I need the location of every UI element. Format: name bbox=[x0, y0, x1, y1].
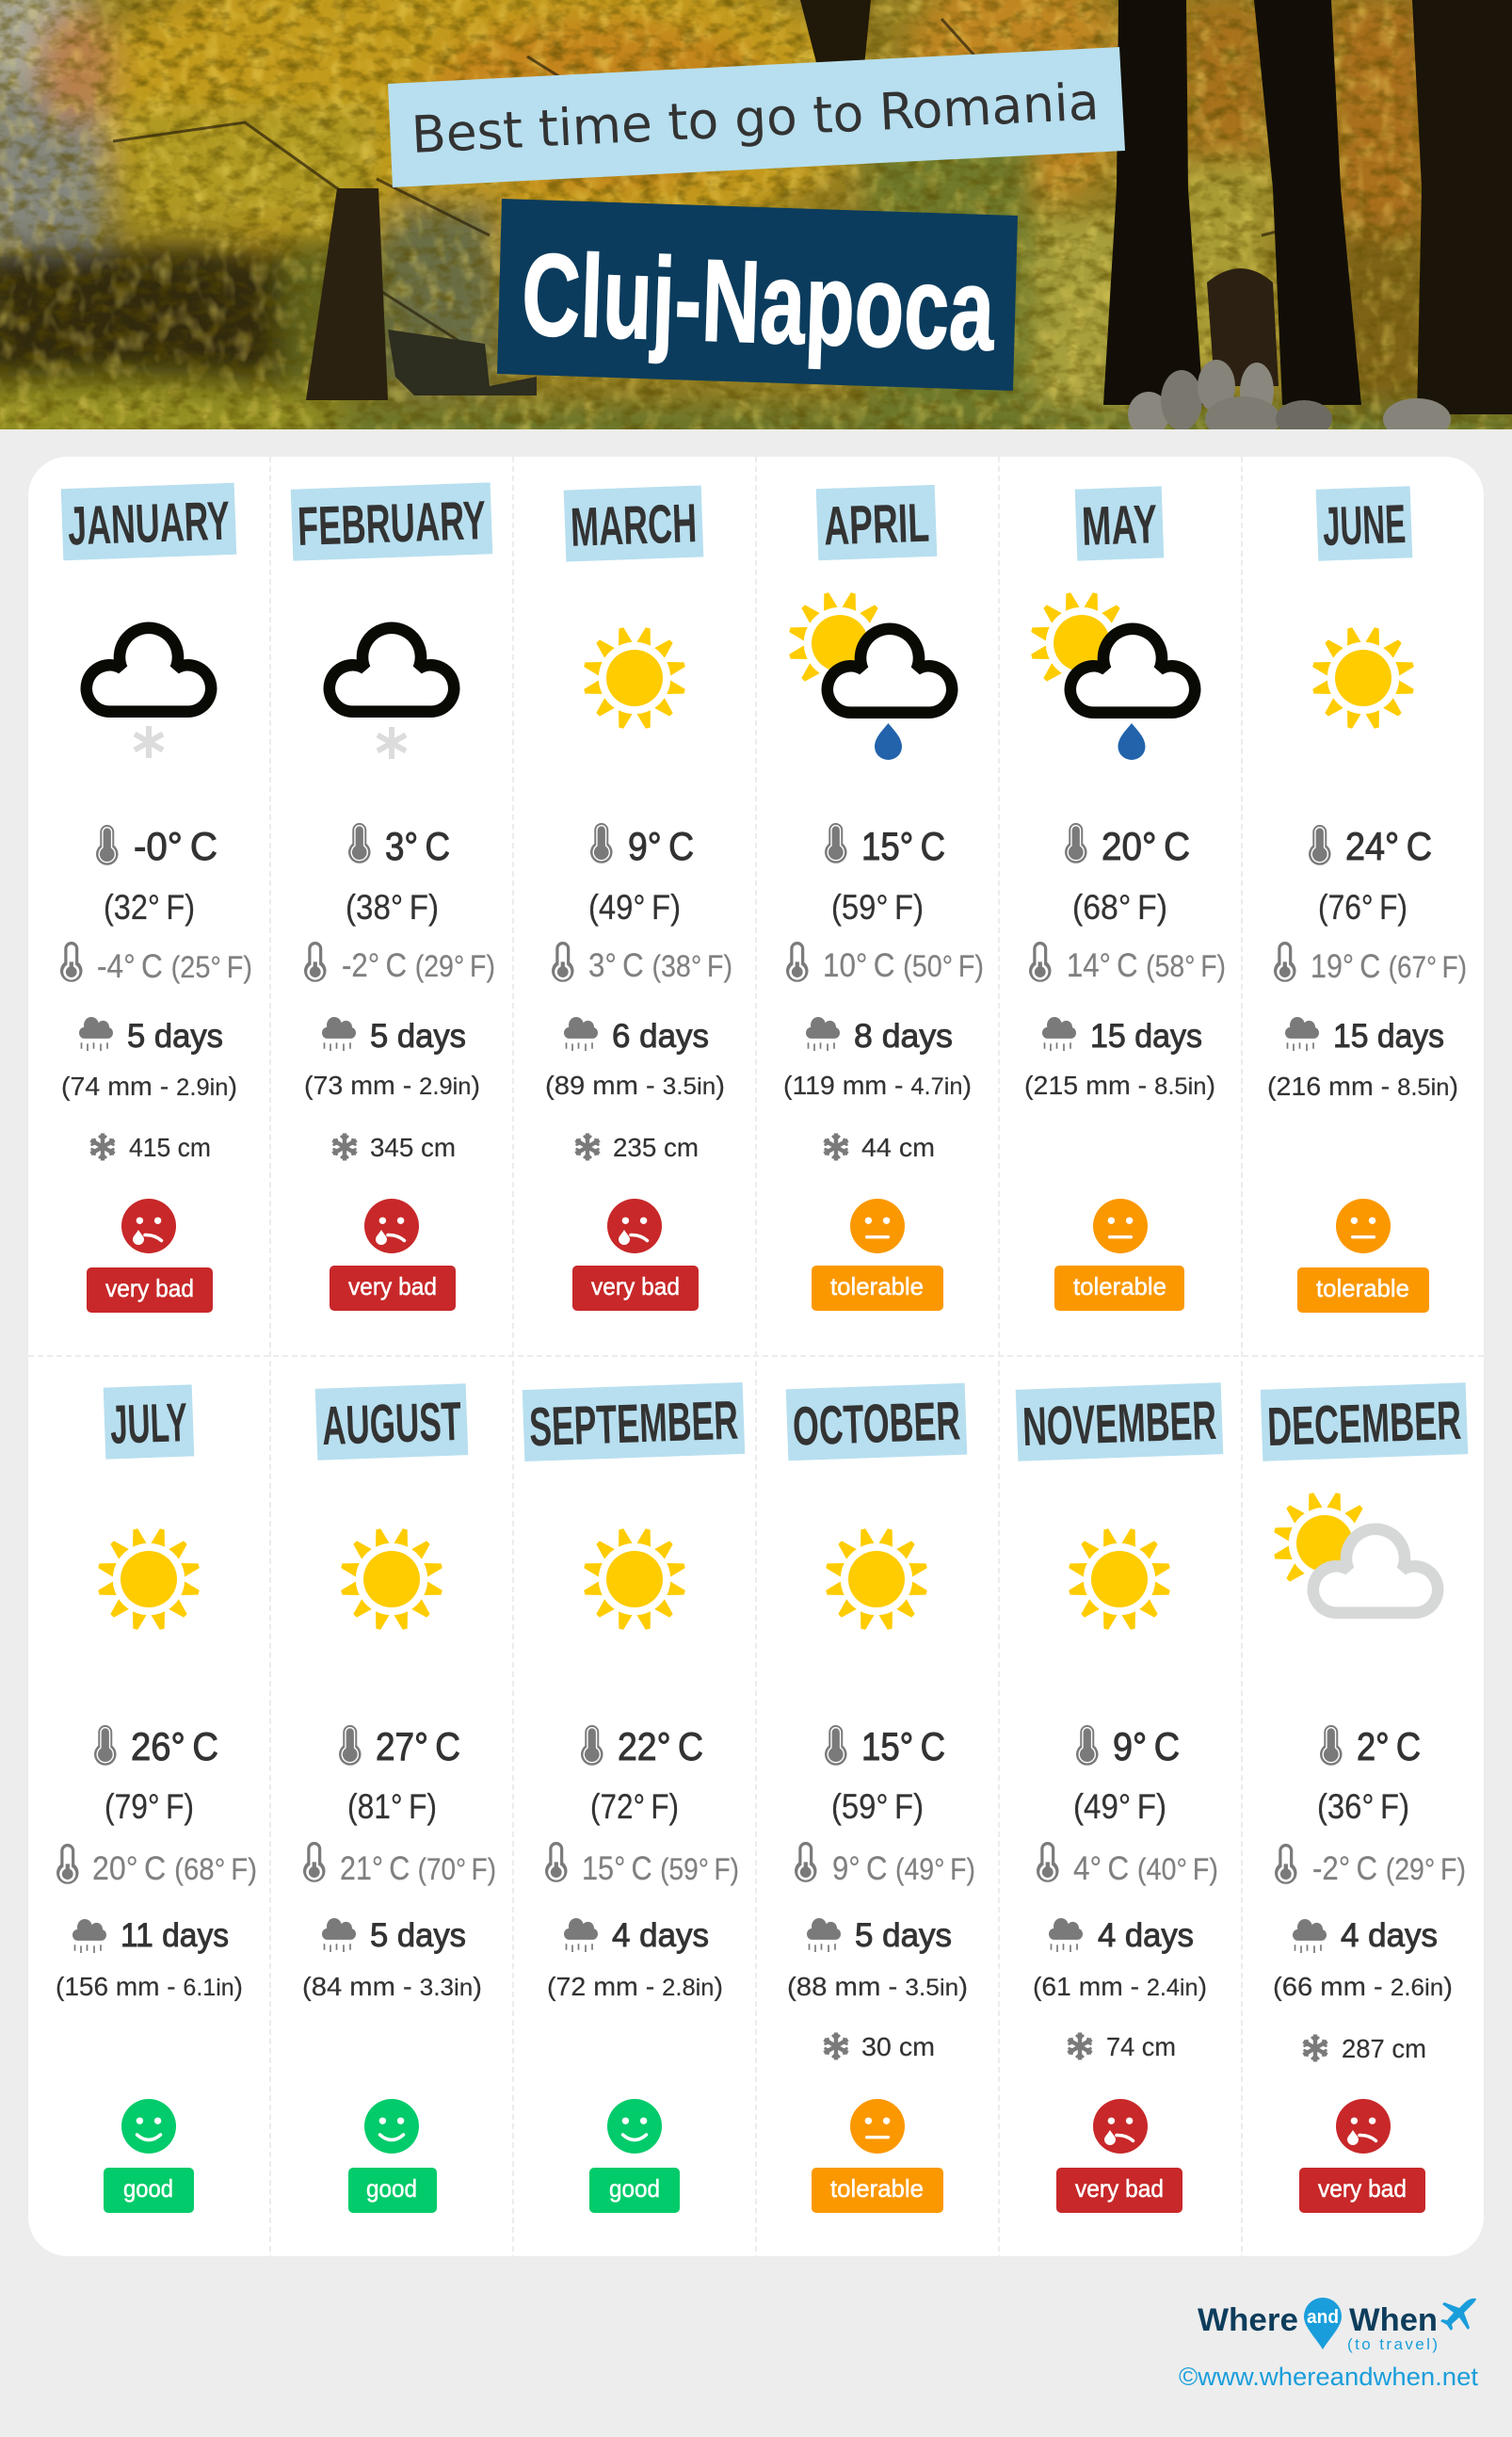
average low temperature: 4° C (40° F) bbox=[1073, 1850, 1218, 1887]
average high temperature: 2° C bbox=[1357, 1724, 1421, 1768]
month label: July bbox=[104, 1384, 194, 1460]
month label: January bbox=[61, 483, 236, 560]
icon: map pin bbox=[1304, 2298, 1342, 2349]
average high temperature: 24° C bbox=[1345, 824, 1432, 868]
rainfall: (88 mm - 3.5in) bbox=[787, 1972, 968, 2001]
month label: September: SEPTEMBER bbox=[528, 1390, 739, 1458]
panel: November bbox=[1016, 1382, 1223, 2213]
average high temperature: 3° C bbox=[385, 824, 450, 868]
rating badge: tolerable bbox=[1316, 1274, 1409, 1302]
icon: sun bbox=[583, 626, 686, 730]
average high temperature bbox=[94, 1724, 218, 1768]
icon: sun bbox=[1068, 1527, 1171, 1631]
rainfall: (215 mm - 8.5in) bbox=[1024, 1071, 1215, 1100]
rating face bbox=[121, 2099, 176, 2154]
rainy days bbox=[322, 1017, 466, 1055]
rating badge bbox=[1297, 1267, 1429, 1313]
logo: Where and When (to travel): (to travel) bbox=[1347, 2335, 1438, 2353]
rainy days bbox=[564, 1917, 709, 1954]
rainy days bbox=[1049, 1917, 1194, 1954]
high in Fahrenheit: (76° F) bbox=[1318, 888, 1407, 927]
rainy days bbox=[72, 1917, 229, 1954]
rainfall: (72 mm - 2.8in) bbox=[547, 1972, 723, 2001]
panel: May bbox=[1024, 486, 1226, 1311]
rainy days bbox=[1042, 1017, 1202, 1055]
panel: monthly climate card bbox=[28, 457, 1484, 2256]
rating badge: tolerable bbox=[830, 2174, 924, 2203]
rainy days: 5 days bbox=[370, 1018, 466, 1055]
rainy days bbox=[564, 1017, 709, 1055]
month label: November bbox=[1016, 1382, 1223, 1461]
logo: Where and When (to travel) bbox=[1198, 2298, 1476, 2353]
rating face bbox=[364, 2099, 419, 2154]
rainy days: 6 days bbox=[612, 1018, 709, 1055]
average high temperature bbox=[1065, 823, 1190, 868]
high in Fahrenheit: (81° F) bbox=[347, 1787, 437, 1826]
rating face bbox=[1093, 1199, 1148, 1253]
logo: Where and When (to travel): When bbox=[1349, 2302, 1438, 2338]
rainy days: 4 days bbox=[1341, 1917, 1438, 1954]
rainy days: 5 days bbox=[370, 1917, 466, 1954]
rating badge bbox=[589, 2168, 680, 2213]
panel: September bbox=[523, 1382, 745, 2213]
average low temperature: 20° C (68° F) bbox=[92, 1850, 257, 1887]
snowfall: 235 cm bbox=[613, 1133, 699, 1162]
panel: March bbox=[545, 485, 732, 1311]
rainy days: 11 days bbox=[121, 1917, 229, 1954]
average low temperature: 19° C (67° F) bbox=[1311, 948, 1467, 985]
rating badge: good bbox=[366, 2174, 417, 2203]
rainy days: 4 days bbox=[1098, 1917, 1194, 1954]
average low temperature bbox=[303, 1842, 496, 1887]
rating badge bbox=[812, 1266, 943, 1311]
high in Fahrenheit: (68° F) bbox=[1072, 888, 1167, 927]
rating face bbox=[1336, 2099, 1391, 2154]
average low temperature bbox=[56, 1844, 257, 1887]
month label: May: MAY bbox=[1081, 493, 1158, 557]
rainfall: (156 mm - 6.1in) bbox=[56, 1972, 243, 2001]
rainy days: 15 days bbox=[1333, 1018, 1444, 1055]
rating badge bbox=[1056, 2168, 1182, 2213]
panel: April bbox=[783, 485, 984, 1311]
rating face bbox=[1093, 2099, 1148, 2154]
average low temperature bbox=[1274, 942, 1467, 985]
month label: October bbox=[786, 1383, 967, 1461]
average low temperature: -2° C (29° F) bbox=[1312, 1850, 1466, 1887]
rainfall: (73 mm - 2.9in) bbox=[304, 1071, 480, 1100]
average low temperature bbox=[795, 1842, 975, 1887]
rainy days bbox=[322, 1917, 466, 1954]
rainfall: (89 mm - 3.5in) bbox=[545, 1071, 725, 1100]
logo: Where and When (to travel): Where bbox=[1198, 2302, 1298, 2338]
month label: February bbox=[291, 482, 492, 561]
rating badge: very bad bbox=[105, 1274, 194, 1302]
panel: October bbox=[786, 1383, 975, 2213]
average low temperature: -4° C (25° F) bbox=[97, 948, 252, 985]
rainfall: (84 mm - 3.3in) bbox=[302, 1972, 482, 2001]
average high temperature: 20° C bbox=[1102, 824, 1190, 868]
rating badge bbox=[348, 2168, 437, 2213]
average high temperature: 15° C bbox=[861, 1724, 945, 1768]
rainy days: 4 days bbox=[612, 1917, 709, 1954]
average high temperature: 22° C bbox=[618, 1724, 703, 1768]
icon: sun bbox=[583, 1527, 686, 1631]
high in Fahrenheit: (59° F) bbox=[831, 888, 924, 927]
rating badge: very bad bbox=[591, 1272, 680, 1300]
average high temperature bbox=[1076, 1724, 1180, 1768]
panel: July bbox=[56, 1384, 257, 2213]
snowfall: 30 cm bbox=[861, 2032, 935, 2061]
average high temperature: 26° C bbox=[131, 1724, 218, 1768]
website credit: ©www.whereandwhen.net bbox=[1179, 2363, 1478, 2391]
snowfall: 287 cm bbox=[1342, 2034, 1426, 2063]
rating face bbox=[607, 2099, 662, 2154]
rating badge: tolerable bbox=[1073, 1272, 1166, 1300]
icon: sun bbox=[825, 1527, 928, 1631]
snowfall bbox=[1068, 2032, 1176, 2061]
icon: sun, cloud and rain drop bbox=[1030, 591, 1195, 760]
average low temperature: 3° C (38° F) bbox=[588, 947, 732, 984]
title banner bbox=[388, 47, 1125, 187]
rating badge bbox=[1054, 1266, 1184, 1311]
snowfall bbox=[576, 1133, 699, 1162]
snowfall: 74 cm bbox=[1106, 2032, 1176, 2061]
icon: sun bbox=[1311, 626, 1415, 730]
average high temperature bbox=[96, 824, 217, 868]
rainy days: 8 days bbox=[854, 1018, 953, 1055]
title banner: Best time to go to Romania bbox=[410, 72, 1101, 165]
icon: cloud with snow bbox=[87, 628, 211, 758]
icon: map pin: and bbox=[1307, 2307, 1339, 2328]
icon: cloud with snow bbox=[330, 628, 454, 759]
month label: September bbox=[523, 1382, 745, 1461]
rainy days bbox=[1285, 1017, 1444, 1055]
rating badge: tolerable bbox=[830, 1272, 924, 1300]
average low temperature: 9° C (49° F) bbox=[832, 1850, 975, 1887]
average high temperature: 9° C bbox=[1113, 1724, 1180, 1768]
rating badge: good bbox=[123, 2174, 173, 2203]
average low temperature bbox=[1037, 1842, 1218, 1887]
month label: March: MARCH bbox=[570, 492, 698, 558]
snowfall: 44 cm bbox=[861, 1133, 935, 1162]
icon: sun and pale cloud bbox=[1273, 1492, 1438, 1613]
panel: January bbox=[60, 483, 252, 1313]
average high temperature bbox=[1320, 1724, 1421, 1768]
snowfall bbox=[90, 1133, 211, 1162]
average low temperature bbox=[304, 942, 495, 984]
month label: January: JANUARY bbox=[67, 491, 231, 557]
rating badge bbox=[87, 1267, 213, 1313]
panel: June bbox=[1267, 486, 1467, 1313]
icon: sun bbox=[340, 1527, 443, 1631]
average high temperature: 27° C bbox=[376, 1724, 460, 1768]
icon: airplane bbox=[1440, 2299, 1476, 2331]
rating face bbox=[850, 1199, 905, 1253]
average high temperature: 9° C bbox=[628, 824, 694, 868]
snowfall bbox=[825, 1133, 935, 1162]
high in Fahrenheit: (32° F) bbox=[104, 888, 195, 927]
average low temperature: 15° C (59° F) bbox=[582, 1850, 739, 1887]
snowfall bbox=[1303, 2034, 1426, 2063]
month label: October: OCTOBER bbox=[792, 1390, 961, 1458]
month label: May bbox=[1075, 486, 1164, 561]
average low temperature bbox=[552, 942, 732, 984]
panel: December bbox=[1261, 1382, 1468, 2213]
high in Fahrenheit: (49° F) bbox=[588, 888, 681, 927]
rainy days bbox=[1293, 1917, 1438, 1954]
rainy days bbox=[806, 1017, 953, 1055]
average high temperature bbox=[825, 823, 945, 868]
month label: June bbox=[1316, 486, 1412, 561]
high in Fahrenheit: (79° F) bbox=[105, 1787, 194, 1826]
city banner bbox=[497, 199, 1018, 391]
month label: March bbox=[564, 485, 703, 562]
high in Fahrenheit: (38° F) bbox=[346, 888, 439, 927]
snowfall: 415 cm bbox=[129, 1133, 211, 1162]
average high temperature bbox=[339, 1724, 460, 1768]
rating face bbox=[364, 1199, 419, 1253]
average low temperature bbox=[786, 942, 984, 984]
average low temperature: -2° C (29° F) bbox=[342, 947, 495, 984]
average high temperature: -0° C bbox=[134, 824, 217, 868]
panel: February bbox=[291, 482, 495, 1311]
rainfall: (66 mm - 2.6in) bbox=[1273, 1972, 1453, 2001]
rainy days: 5 days bbox=[127, 1018, 223, 1055]
rating badge bbox=[1299, 2168, 1425, 2213]
rating face bbox=[850, 2099, 905, 2154]
average low temperature bbox=[60, 942, 252, 985]
rainfall: (119 mm - 4.7in) bbox=[783, 1071, 972, 1100]
month label: February: FEBRUARY bbox=[297, 490, 487, 557]
snowfall bbox=[333, 1133, 456, 1162]
average low temperature: 14° C (58° F) bbox=[1067, 947, 1226, 984]
rating badge bbox=[572, 1266, 699, 1311]
average high temperature bbox=[590, 823, 694, 868]
average low temperature: 10° C (50° F) bbox=[823, 947, 984, 984]
rainfall: (61 mm - 2.4in) bbox=[1033, 1972, 1207, 2001]
month label: July: JULY bbox=[109, 1392, 188, 1456]
average low temperature bbox=[1029, 942, 1226, 984]
average low temperature: 21° C (70° F) bbox=[340, 1850, 496, 1887]
high in Fahrenheit: (59° F) bbox=[831, 1787, 924, 1826]
average low temperature bbox=[545, 1842, 739, 1887]
rating badge: very bad bbox=[1075, 2174, 1164, 2203]
month label: April bbox=[816, 485, 937, 560]
average high temperature bbox=[348, 823, 450, 868]
rating face bbox=[121, 1199, 176, 1253]
rating badge: very bad bbox=[348, 1272, 437, 1300]
rating badge: good bbox=[609, 2174, 660, 2203]
panel: August bbox=[302, 1383, 496, 2213]
rating face bbox=[607, 1199, 662, 1253]
header photo: autumn park bbox=[0, 0, 1512, 461]
average high temperature bbox=[825, 1724, 945, 1768]
rainfall: (74 mm - 2.9in) bbox=[61, 1072, 237, 1101]
icon: sun, cloud and rain drop bbox=[788, 591, 952, 760]
icon: sun bbox=[97, 1527, 201, 1631]
average high temperature: 15° C bbox=[861, 824, 945, 868]
rainy days bbox=[807, 1917, 952, 1954]
snowfall bbox=[825, 2032, 935, 2061]
rating face bbox=[1336, 1199, 1391, 1253]
high in Fahrenheit: (72° F) bbox=[590, 1787, 679, 1826]
average high temperature bbox=[1309, 824, 1432, 868]
rainfall: (216 mm - 8.5in) bbox=[1267, 1072, 1458, 1101]
rainy days: 5 days bbox=[855, 1917, 952, 1954]
month label: August: AUGUST bbox=[321, 1391, 462, 1457]
average high temperature bbox=[581, 1724, 703, 1768]
rating badge bbox=[812, 2168, 943, 2213]
average low temperature bbox=[1275, 1844, 1466, 1887]
month label: April: APRIL bbox=[823, 492, 930, 557]
rainy days: 15 days bbox=[1090, 1018, 1202, 1055]
month label: June: JUNE bbox=[1322, 493, 1407, 557]
high in Fahrenheit: (36° F) bbox=[1317, 1787, 1409, 1826]
month label: August bbox=[315, 1383, 468, 1461]
month label: November: NOVEMBER bbox=[1021, 1390, 1217, 1458]
city banner: Cluj-Napoca bbox=[520, 230, 997, 376]
rating badge bbox=[104, 2168, 194, 2213]
rating badge bbox=[330, 1266, 456, 1311]
rating badge: very bad bbox=[1318, 2174, 1407, 2203]
high in Fahrenheit: (49° F) bbox=[1073, 1787, 1166, 1826]
snowfall: 345 cm bbox=[370, 1133, 456, 1162]
rainy days bbox=[79, 1017, 223, 1055]
